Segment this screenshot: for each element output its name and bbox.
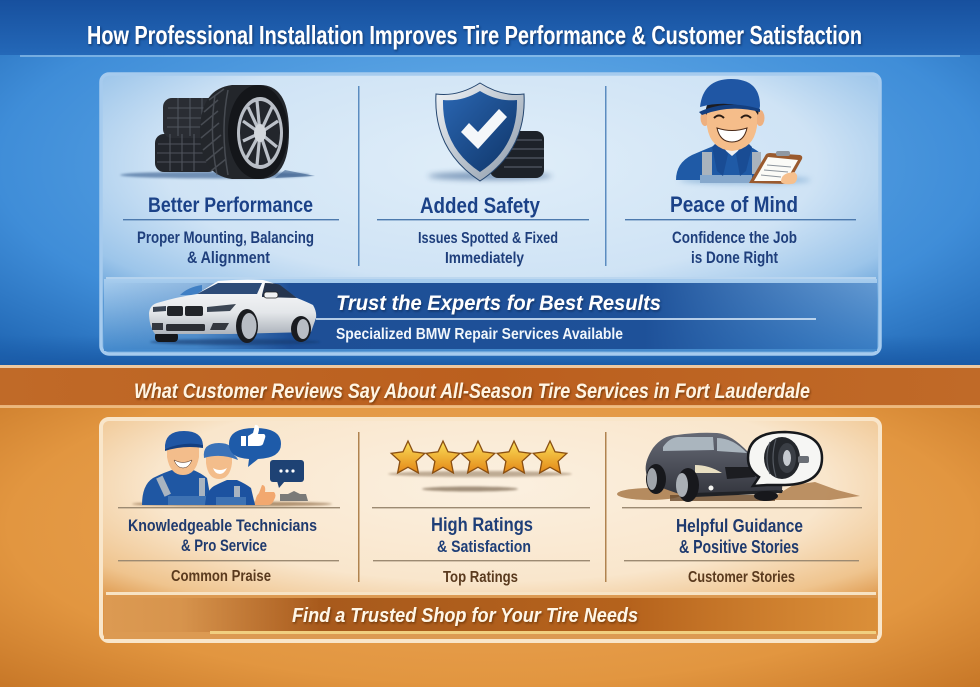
text: Issues Spotted: Immediately [445, 250, 524, 267]
text: Proper Mounting: Proper Mounting, Balancing [137, 229, 314, 247]
heading: Trust the Experts: Trust the Experts for Best Results [336, 292, 661, 315]
text: Customer Stories: Customer Stories [688, 569, 795, 586]
panel: professional installation [101, 74, 880, 354]
text: Confidence [672, 229, 797, 267]
banner: find a trusted shop: Find a Trusted Shop for Your Tire Needs [292, 605, 638, 627]
heading: High Ratings [431, 515, 533, 556]
text: Top Ratings: Top Ratings [443, 569, 518, 586]
text: Common Praise: Common Praise [171, 568, 271, 585]
heading: High Ratings: & Satisfaction [437, 537, 531, 556]
text: Proper Mounting: & Alignment [187, 249, 270, 267]
text: Issues Spotted [418, 230, 558, 267]
banner: trust the experts [104, 283, 877, 349]
icon: dark car with tire bubble [617, 432, 860, 502]
icon: five star rating [388, 441, 572, 492]
text: Confidence: is Done Right [691, 249, 778, 267]
section title: customer reviews: What Customer Reviews Say About All-Season Tire Services in Fort Lauderdale [134, 380, 810, 403]
text: Specialized BMW: Specialized BMW Repair Services Available [336, 326, 623, 343]
heading: Added Safety: Added Safety [420, 193, 541, 218]
panel: customer reviews [101, 419, 880, 641]
heading: Helpful Guidance: Helpful Guidance [676, 516, 803, 536]
text: Proper Mounting [137, 229, 314, 267]
icon: technicians with thumbs up [132, 425, 332, 506]
banner: find a trusted shop [104, 598, 877, 634]
heading: Knowledgeable Technicians: & Pro Service [181, 536, 267, 555]
heading: Peace of Mind: Peace of Mind [670, 192, 798, 217]
icon: stacked tires [120, 85, 315, 179]
text: Confidence: Confidence the Job [672, 229, 797, 247]
blue section background [0, 0, 980, 366]
orange section background [0, 365, 980, 687]
icon: smiling mechanic [676, 79, 811, 184]
icon: white BMW car [149, 280, 320, 345]
heading: Better Performance: Better Performance [148, 194, 313, 217]
heading: High Ratings: High Ratings [431, 515, 533, 536]
icon: safety shield [428, 83, 552, 181]
heading: Helpful Guidance: & Positive Stories [679, 537, 799, 557]
text: Issues Spotted: Issues Spotted & Fixed [418, 230, 558, 247]
heading: Knowledgeable Technicians: Knowledgeable Technicians [128, 516, 317, 535]
heading: Helpful Guidance [676, 516, 803, 557]
heading: Knowledgeable Technicians [128, 516, 317, 555]
